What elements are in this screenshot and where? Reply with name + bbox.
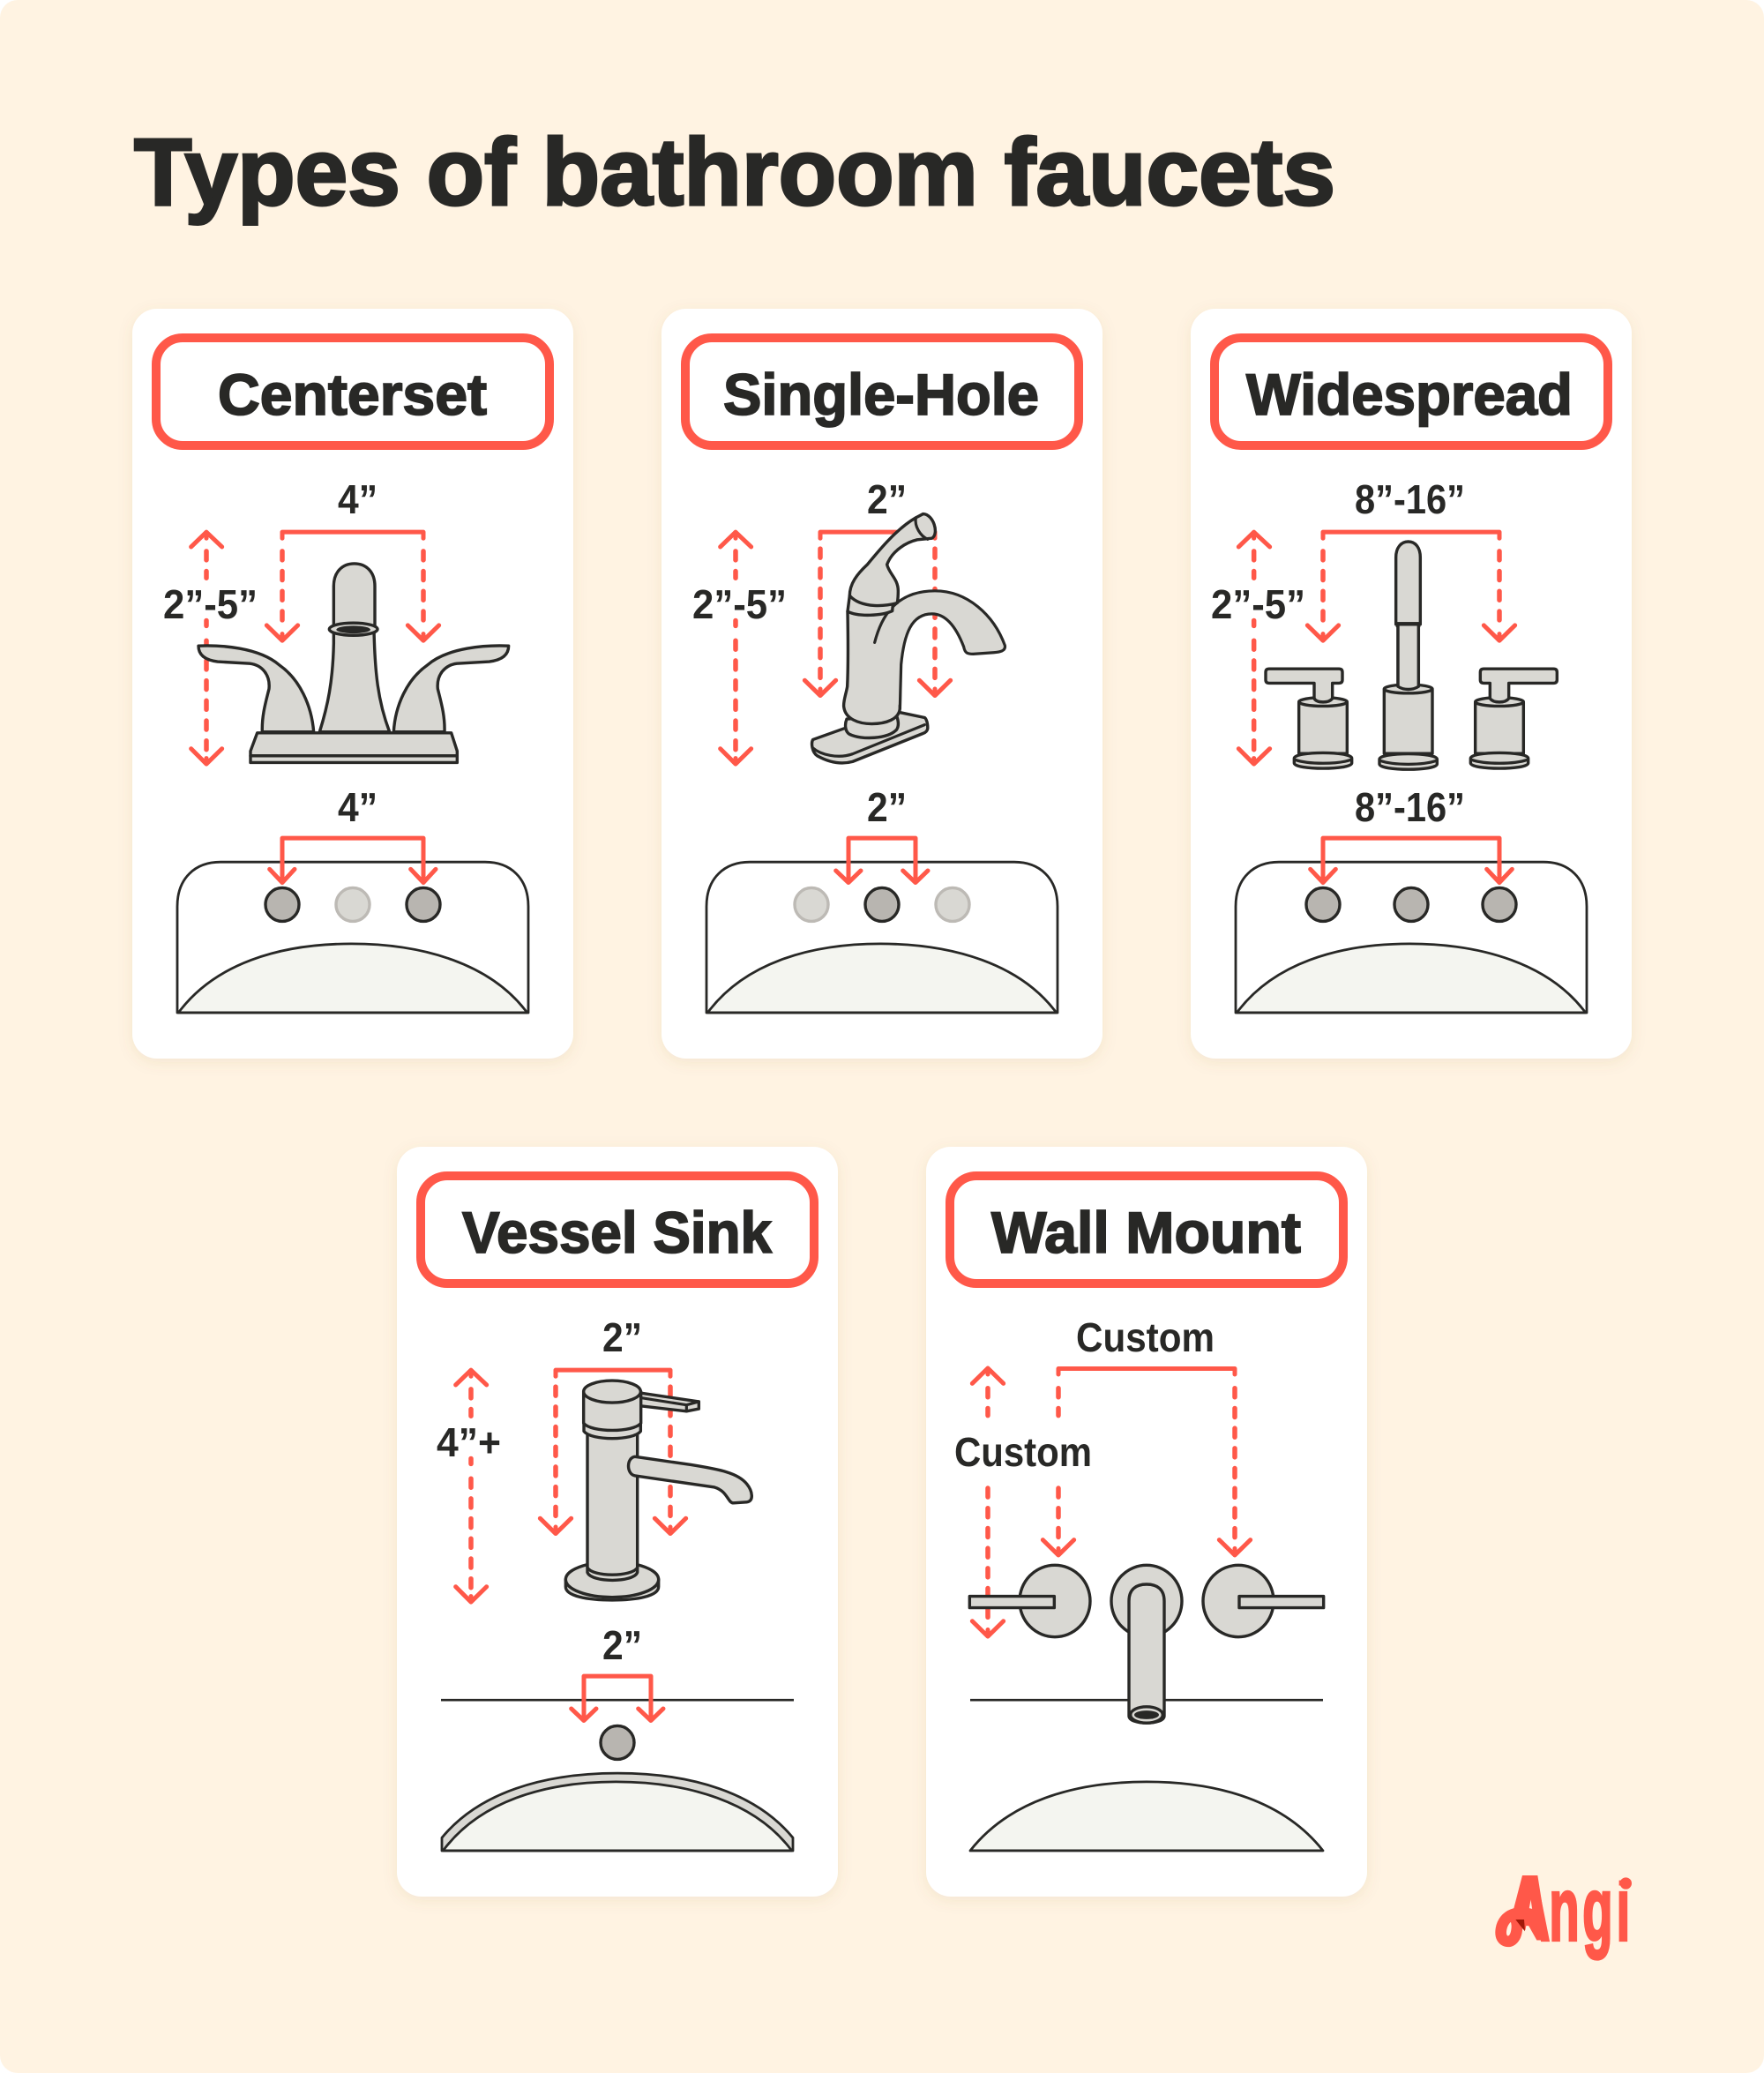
arrow: faucet width bracket bbox=[804, 532, 951, 696]
heading: Widespread bbox=[1215, 338, 1608, 445]
heading: Centerset: Centerset bbox=[218, 362, 487, 427]
diagram: vessel faucet and sink bbox=[441, 1370, 794, 1851]
icon: right handle bbox=[1203, 1565, 1324, 1637]
sink spacing label: 4” bbox=[338, 784, 377, 830]
arrow: faucet width bracket bbox=[540, 1370, 686, 1534]
sink bbox=[177, 862, 528, 1013]
panel: Widespread bbox=[1191, 309, 1632, 1059]
arrow: faucet width bracket bbox=[1043, 1369, 1251, 1555]
arrow: height bbox=[972, 1368, 1004, 1636]
icon: wall spout bbox=[1111, 1565, 1182, 1723]
panel: Wall Mount bbox=[926, 1147, 1367, 1897]
arrow: sink spacing bracket bbox=[572, 1676, 663, 1721]
faucet width label: 8”-16” bbox=[1355, 476, 1465, 522]
icon: left handle bbox=[969, 1565, 1090, 1637]
icon: vessel faucet bbox=[565, 1381, 751, 1600]
faucet width label: 4” bbox=[338, 476, 377, 522]
faucet width label: 2” bbox=[867, 476, 907, 522]
diagram: single-hole faucet and sink bbox=[706, 514, 1058, 1013]
sink bbox=[706, 862, 1058, 1013]
diagram: widespread faucet and sink bbox=[1236, 532, 1587, 1013]
counter line and hole bbox=[441, 1700, 794, 1759]
diagram: wall mount faucet and sink bbox=[969, 1368, 1324, 1851]
icon: right handle bbox=[1470, 669, 1557, 768]
title: Types of bathroom faucets bbox=[134, 118, 1335, 225]
faucet height label: Custom bbox=[954, 1429, 1092, 1475]
heading: Wall Mount: Wall Mount bbox=[991, 1200, 1301, 1265]
faucet height label: 2”-5” bbox=[1211, 581, 1305, 627]
heading: Wall Mount bbox=[950, 1176, 1343, 1283]
logo: Angi: Angi bbox=[1514, 1860, 1630, 1960]
diagram: centerset faucet and sink bbox=[177, 532, 528, 1013]
heading: Widespread: Widespread bbox=[1246, 362, 1573, 427]
arrow: height bbox=[456, 1370, 487, 1602]
icon: centerset faucet bbox=[198, 564, 509, 762]
counter line bbox=[970, 1699, 1323, 1701]
vessel sink bbox=[442, 1773, 793, 1851]
sink bbox=[1236, 862, 1587, 1013]
icon: left handle bbox=[1266, 669, 1352, 768]
sink spacing label: 8”-16” bbox=[1355, 784, 1465, 830]
heading: Vessel Sink bbox=[421, 1176, 814, 1283]
faucet width label: Custom bbox=[1076, 1314, 1215, 1360]
faucet height label: 2”-5” bbox=[692, 581, 787, 627]
heading: Single-Hole: Single-Hole bbox=[723, 362, 1039, 427]
sink spacing label: 2” bbox=[867, 784, 907, 830]
arrow: sink spacing bracket bbox=[1311, 838, 1512, 883]
arrow: faucet width bracket bbox=[1307, 532, 1515, 640]
sink basin bbox=[970, 1782, 1323, 1851]
icon: single-hole faucet bbox=[812, 514, 1005, 763]
sink spacing label: 2” bbox=[602, 1622, 642, 1668]
panel: Single-Hole bbox=[662, 309, 1102, 1059]
heading: Centerset bbox=[156, 338, 549, 445]
heading: Single-Hole bbox=[685, 338, 1079, 445]
arrow: sink spacing bracket bbox=[270, 838, 436, 883]
faucet width label: 2” bbox=[602, 1314, 642, 1360]
arrow: sink spacing bracket bbox=[836, 838, 928, 883]
heading: Vessel Sink: Vessel Sink bbox=[462, 1200, 772, 1265]
arrow: height bbox=[1238, 532, 1270, 764]
panel: Centerset bbox=[132, 309, 573, 1059]
faucet height label: 4”+ bbox=[437, 1419, 501, 1465]
arrow: faucet width bracket bbox=[266, 532, 439, 640]
icon: center spout bbox=[1379, 542, 1437, 769]
arrow: height bbox=[721, 532, 751, 764]
arrow: height bbox=[191, 532, 222, 764]
panel: Vessel Sink bbox=[397, 1147, 838, 1897]
faucet height label: 2”-5” bbox=[163, 581, 258, 627]
